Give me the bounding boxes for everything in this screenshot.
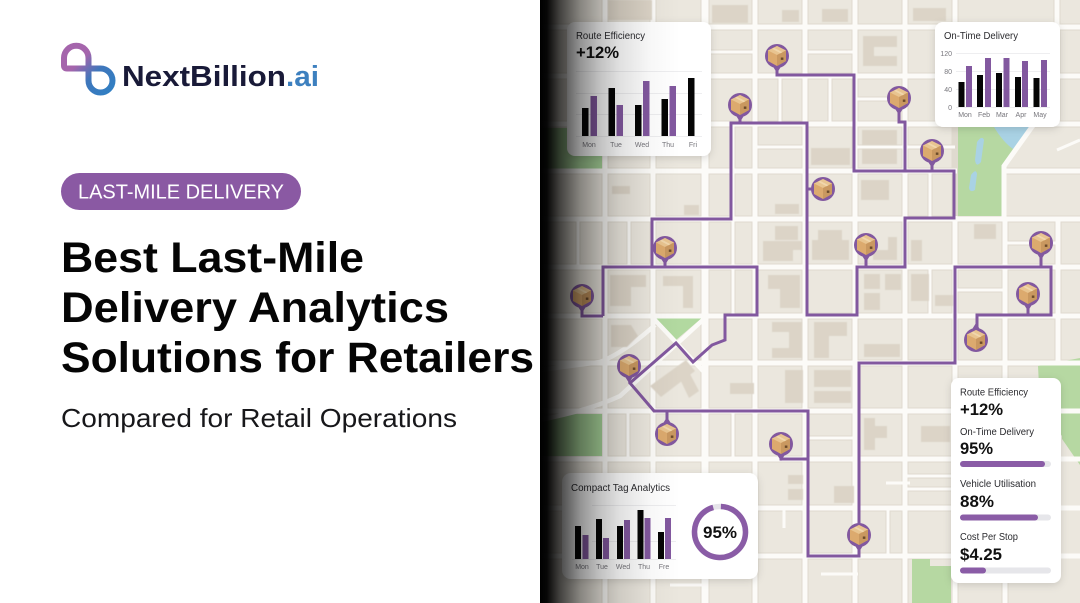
bar chart: Fre — [659, 564, 669, 571]
parks and water — [540, 126, 1080, 603]
card value: +12% — [576, 43, 619, 62]
card heading: Route Efficiency — [576, 31, 645, 42]
card: compact tag analytics — [562, 473, 758, 579]
bar chart: Feb — [978, 112, 990, 119]
pin 5 — [811, 177, 835, 201]
category pill — [61, 173, 301, 210]
KPI on-time delivery: 95% — [960, 439, 993, 458]
bar chart: Mar — [996, 112, 1009, 119]
KPI cost per stop: Cost Per Stop — [960, 532, 1018, 543]
delivery pins — [570, 44, 1053, 552]
y axis labels: 120 — [940, 51, 952, 58]
logo — [64, 46, 319, 93]
title: Best Last-Mile — [61, 234, 364, 282]
pin 6 — [653, 236, 677, 265]
pin 2 — [728, 93, 752, 122]
category pill: LAST-MILE DELIVERY — [78, 182, 284, 204]
card: route efficiency chart — [567, 22, 711, 156]
KPI route efficiency: +12% — [960, 400, 1003, 419]
pin 11 — [964, 323, 988, 352]
pin 9 — [1016, 282, 1040, 311]
donut gauge 95%: 95% — [703, 523, 737, 542]
pin 8 — [1029, 231, 1053, 260]
bar chart — [575, 510, 671, 571]
y axis labels: 80 — [944, 69, 952, 76]
bar chart: Mon — [958, 112, 972, 119]
pin 10 — [570, 284, 594, 313]
subtitle: Compared for Retail Operations — [61, 403, 457, 433]
pin 14 — [769, 432, 793, 461]
logo wordmark: NextBillion — [122, 61, 286, 93]
block outlines — [540, 0, 1080, 603]
KPI cost per stop — [960, 532, 1051, 574]
bar chart: Mon — [575, 564, 589, 571]
card: KPI summary — [951, 378, 1061, 583]
y axis labels: 0 — [948, 105, 952, 112]
buildings — [608, 0, 996, 503]
pin 3 — [887, 86, 911, 115]
bar chart: Wed — [635, 142, 649, 149]
pin 4 — [920, 139, 944, 168]
bar chart — [958, 58, 1047, 119]
bar chart: May — [1033, 112, 1047, 119]
KPI cost per stop: $4.25 — [960, 545, 1002, 564]
logo suffix: .ai — [286, 61, 319, 93]
map panel — [540, 0, 1080, 603]
card heading: On-Time Delivery — [944, 31, 1018, 42]
bar chart: Thu — [662, 142, 674, 149]
KPI route efficiency: Route Efficiency — [960, 388, 1028, 398]
delivery route — [582, 56, 1051, 556]
pin 7 — [854, 233, 878, 262]
pin 15 — [847, 523, 871, 552]
streets — [540, 0, 1080, 603]
title — [61, 234, 534, 382]
KPI on-time delivery — [960, 427, 1051, 467]
card heading: Compact Tag Analytics — [571, 483, 670, 494]
donut gauge 95% — [694, 506, 746, 558]
bar chart — [582, 78, 698, 149]
pin 13 — [655, 417, 679, 446]
title: Solutions for Retailers — [61, 334, 534, 382]
logo mark — [64, 46, 112, 92]
title: Delivery Analytics — [61, 284, 449, 332]
KPI on-time delivery: On-Time Delivery — [960, 427, 1034, 438]
bar chart: Fri — [689, 142, 698, 149]
bar chart: Mon — [582, 142, 596, 149]
KPI vehicle utilisation: Vehicle Utilisation — [960, 479, 1036, 490]
KPI route efficiency — [960, 388, 1028, 419]
y axis labels — [940, 51, 952, 112]
y axis labels: 40 — [944, 87, 952, 94]
pin 1 — [765, 44, 789, 73]
KPI vehicle utilisation — [960, 479, 1051, 520]
bar chart: Tue — [596, 564, 608, 571]
bar chart: Wed — [616, 564, 630, 571]
map edge shadow — [540, 0, 680, 603]
pin 12 — [617, 354, 641, 383]
left panel — [0, 0, 540, 603]
bar chart: Apr — [1016, 112, 1027, 119]
bar chart: Thu — [638, 564, 650, 571]
card: on-time delivery chart — [935, 22, 1060, 127]
bar chart: Tue — [610, 142, 622, 149]
KPI vehicle utilisation: 88% — [960, 492, 994, 511]
